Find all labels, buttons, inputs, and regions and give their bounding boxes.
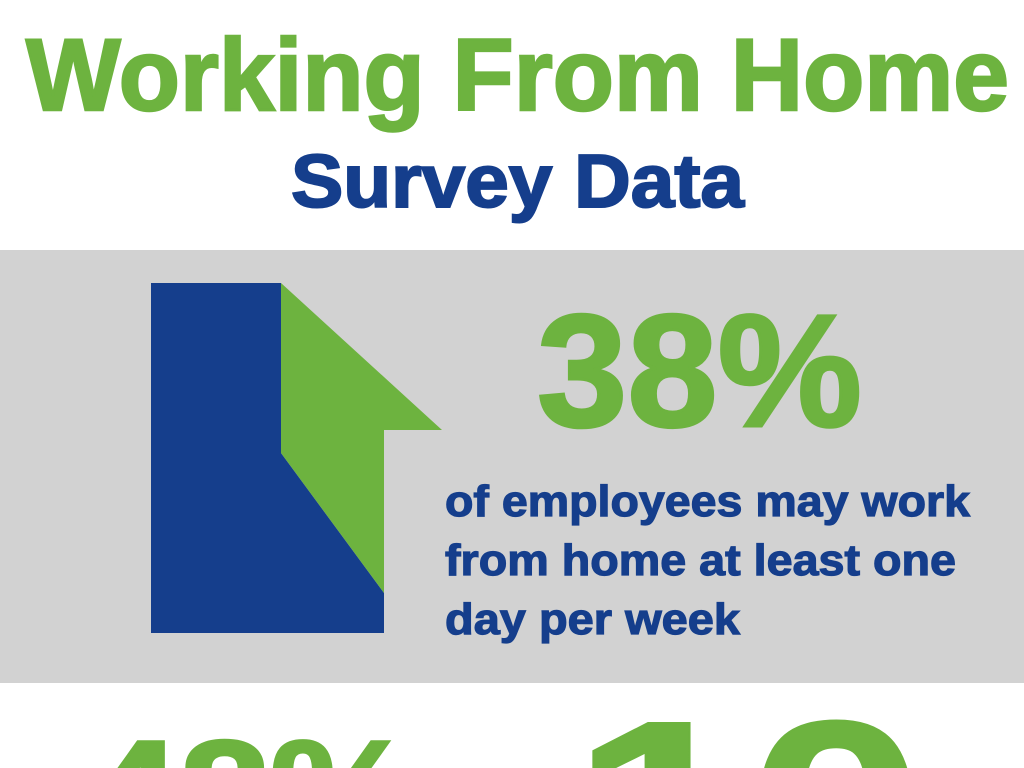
icon: house arrow	[151, 283, 442, 633]
statistic: 38%: 38%	[537, 281, 862, 460]
text block: description: from home at least one	[445, 536, 956, 585]
text block: description: day per week	[445, 595, 741, 644]
panel: 38% statistic	[0, 250, 1024, 683]
title: Working From Home	[26, 18, 1009, 132]
text block: description: of employees may work	[445, 477, 971, 526]
subtitle: Survey Data	[291, 139, 745, 223]
text block: description	[445, 477, 971, 644]
